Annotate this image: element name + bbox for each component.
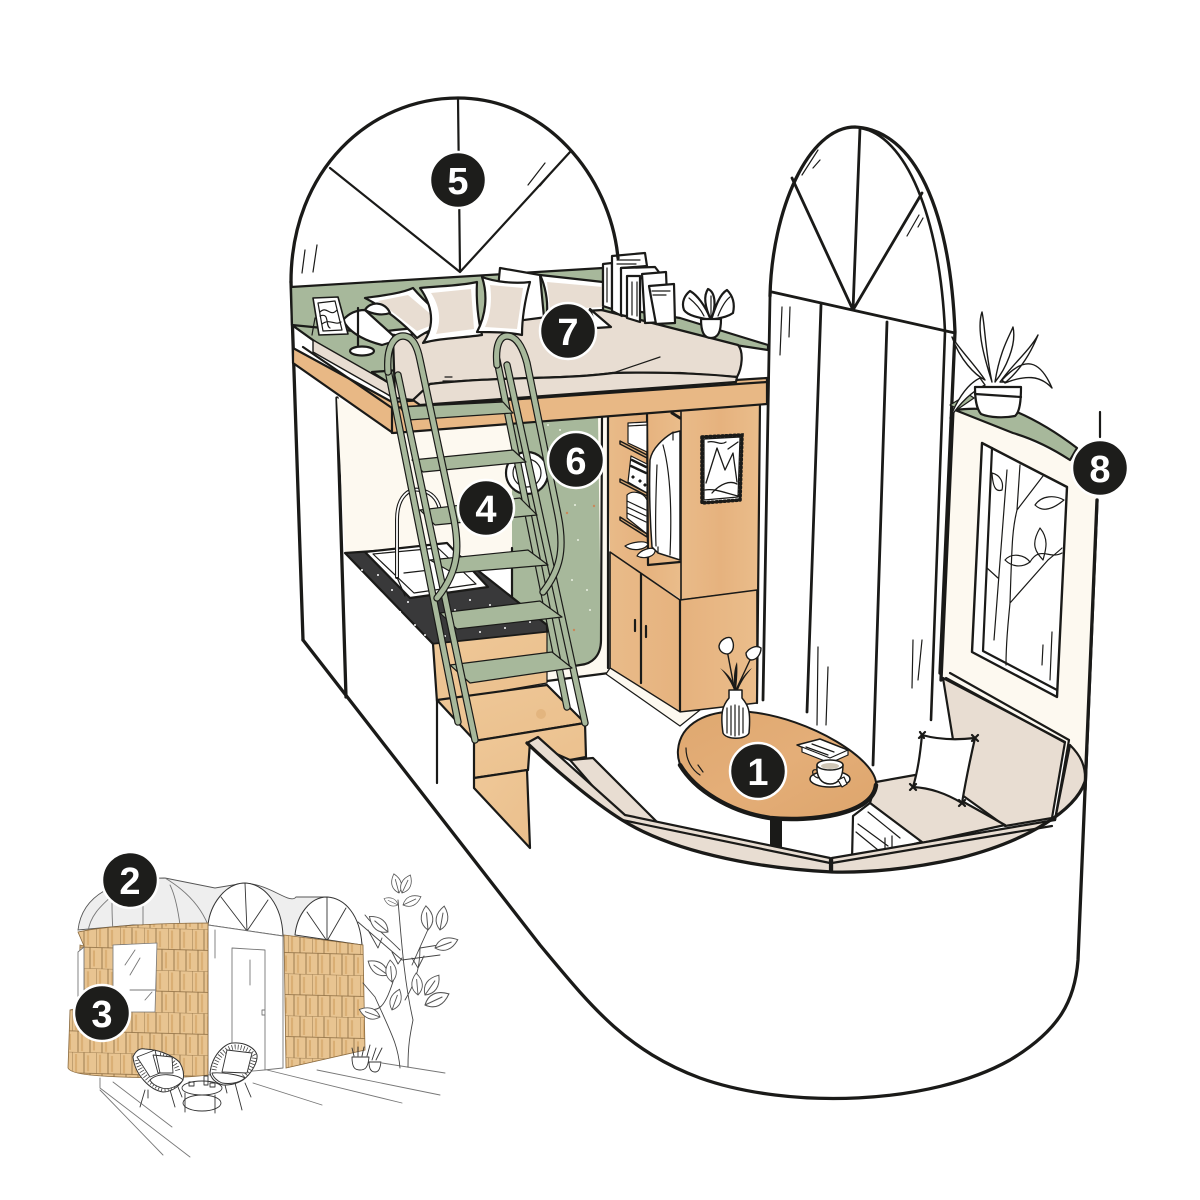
vase with flowers	[719, 637, 761, 738]
badge 4: 4	[475, 489, 497, 531]
side table	[182, 1076, 222, 1113]
washing machine door	[506, 452, 548, 494]
badge 3	[74, 985, 130, 1041]
bunting	[358, 922, 440, 968]
right roof arch and door	[763, 127, 955, 770]
mountain picture	[702, 435, 742, 503]
coffee cup	[810, 760, 850, 787]
potted plants	[352, 1045, 382, 1072]
cushion tassels	[910, 732, 978, 806]
window	[972, 443, 1067, 697]
right rim	[832, 745, 1085, 872]
ladder treads	[400, 402, 572, 683]
shelves	[620, 441, 647, 537]
bistro table	[678, 711, 876, 819]
badge 6: 6	[565, 441, 587, 483]
mattress	[393, 307, 742, 400]
cabinet lines	[608, 412, 680, 712]
panel outline	[512, 415, 609, 681]
shingled right wall	[284, 935, 365, 1068]
pillows	[365, 275, 611, 343]
white end post	[757, 402, 768, 705]
left bedside platform	[292, 325, 413, 400]
kitchen counter	[345, 490, 547, 644]
bed skirt	[413, 373, 737, 405]
roof window glazing bars	[330, 98, 570, 272]
ladder back rails	[497, 336, 585, 723]
front rim	[527, 737, 1085, 872]
green roof edge	[955, 409, 1077, 460]
left bench seat	[570, 758, 658, 823]
outer shell	[303, 500, 1097, 1099]
spider plant	[950, 312, 1052, 418]
right chair	[210, 1043, 257, 1110]
bed	[343, 268, 742, 405]
table leg	[770, 815, 782, 851]
front arch windows	[208, 883, 283, 936]
left chair	[133, 1049, 184, 1107]
side window	[113, 943, 157, 1012]
badge 8: 8	[1089, 449, 1111, 491]
leader line to 8	[1099, 412, 1101, 437]
counter speckles	[361, 569, 531, 637]
left wall glass sliver	[78, 947, 84, 1000]
right wardrobe door	[681, 402, 760, 600]
badge 6	[548, 432, 604, 488]
stair block	[433, 632, 586, 848]
badge 7	[540, 303, 596, 359]
badge 2	[102, 852, 158, 908]
right wall	[940, 312, 1097, 782]
stored boxes	[627, 422, 647, 534]
glass highlights	[780, 150, 923, 725]
shingled left wall	[68, 923, 208, 1078]
cushion	[913, 735, 975, 803]
badge 4	[458, 480, 514, 536]
mezzanine floor	[293, 347, 767, 433]
badge 5: 5	[447, 161, 469, 203]
badge 3: 3	[91, 994, 113, 1036]
roof vault	[78, 878, 362, 945]
door panel lines	[763, 296, 887, 765]
hanging shirt	[650, 413, 680, 560]
wardrobe interior wood	[607, 406, 682, 600]
right wall line over bench	[1085, 500, 1097, 790]
floor skirting	[606, 668, 700, 726]
white pillows behind	[495, 268, 545, 330]
plant on shelf	[683, 289, 734, 338]
badge 7: 7	[557, 312, 579, 354]
loft back wall	[291, 268, 603, 340]
badge 1	[730, 743, 786, 799]
sink	[365, 543, 488, 598]
badge 5	[430, 152, 486, 208]
small ledge	[950, 394, 974, 409]
book stack	[797, 739, 848, 763]
bedside lamp	[350, 304, 390, 356]
badge 1: 1	[747, 752, 769, 794]
tree	[358, 873, 460, 1068]
badge 8	[1072, 440, 1128, 496]
books	[603, 253, 675, 324]
slippers	[625, 542, 655, 558]
lower cabinet	[610, 552, 757, 712]
picture frame	[312, 297, 348, 335]
ground lines	[100, 1063, 445, 1157]
faucet	[397, 490, 440, 577]
exterior view	[68, 873, 460, 1157]
green splashback panel	[512, 415, 601, 671]
badge 2: 2	[119, 861, 141, 903]
left roof arch	[291, 98, 618, 282]
back wall	[337, 398, 515, 560]
right shelf	[590, 304, 768, 350]
left wall outline	[291, 282, 346, 697]
tree in window	[987, 465, 1062, 665]
utility panel strip	[510, 410, 610, 682]
door block	[208, 925, 283, 1075]
under-seat storage	[852, 803, 922, 860]
ladder front rails	[388, 336, 475, 740]
tiny house cutaway	[291, 127, 1097, 1099]
right bench	[852, 673, 1069, 860]
cabinet handles	[635, 620, 646, 637]
wardrobe	[606, 402, 768, 726]
panel speckles	[541, 424, 595, 631]
